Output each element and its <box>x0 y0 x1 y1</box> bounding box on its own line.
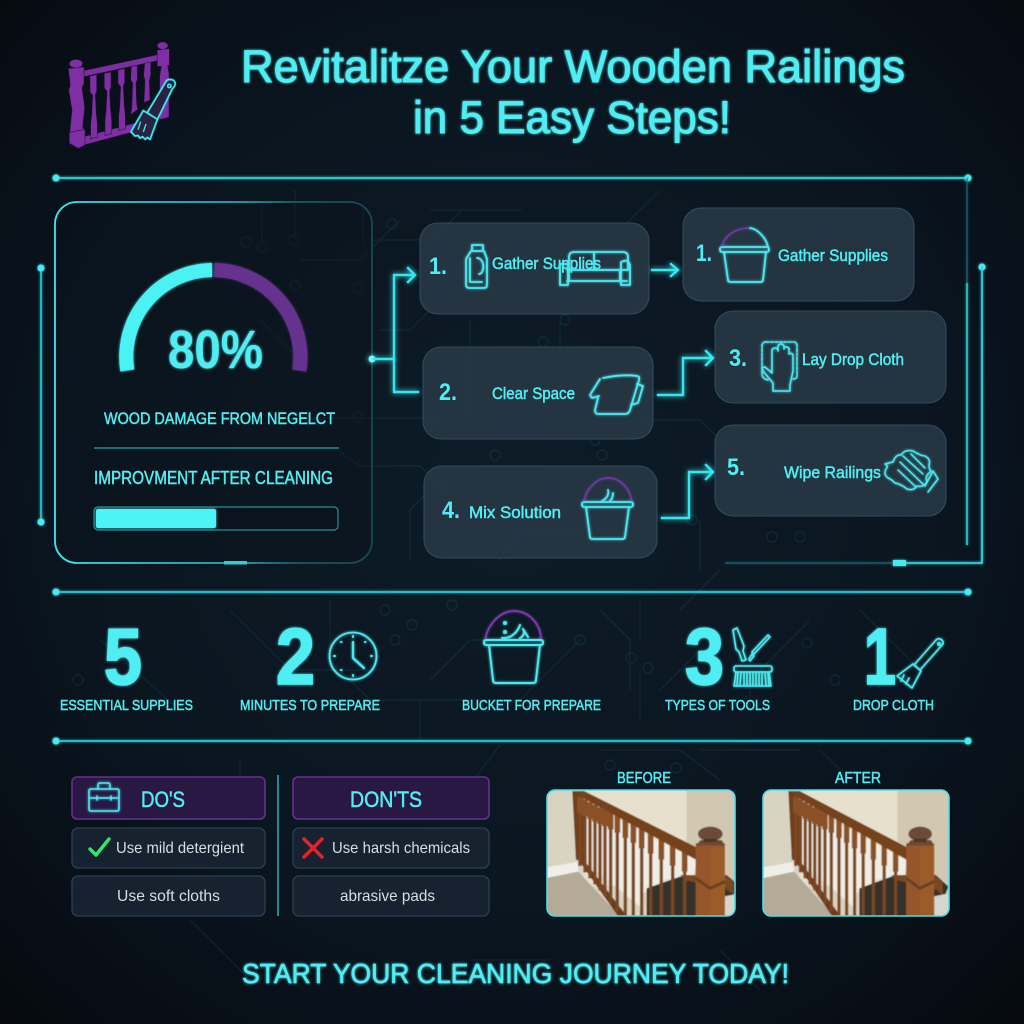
stat: 2 minutes to prepare: MINUTES TO PREPARE <box>240 698 380 714</box>
arrow: step 1 to next card <box>652 264 678 276</box>
panel: damage stats <box>55 202 372 564</box>
stat: bucket for prepare <box>462 611 601 714</box>
item: use soft cloths: Use soft cloths <box>117 888 220 905</box>
after photo: AFTER <box>835 770 881 787</box>
stat: 1 drop cloth: 1 <box>864 612 896 701</box>
step card: 1 gather supplies with sofa: 1. <box>429 253 447 280</box>
divider line above stats <box>52 588 972 596</box>
step card: 5 wipe railings <box>715 425 946 516</box>
arrows from panel to steps 1 and 2 <box>368 268 418 392</box>
icon: bucket with bubbles <box>484 611 543 683</box>
don'ts column <box>293 777 489 916</box>
item: use mild detergent: Use mild detergient <box>116 840 245 857</box>
step card: 4 mix solution <box>424 466 657 558</box>
icon: toolbox <box>89 783 119 811</box>
icon: hand wiping with cloth <box>885 450 938 492</box>
step card: 3 lay drop cloth: 3. <box>729 345 747 372</box>
don'ts column: DON'TS <box>350 787 422 812</box>
step card: 1 gather supplies with bucket: Gather Supplies <box>778 246 888 265</box>
arrow: step 2 to step 3 <box>658 351 713 395</box>
step card: 1 gather supplies with sofa: Gather Supplies <box>492 254 601 273</box>
do's column <box>72 777 265 916</box>
improvement label: IMPROVMENT AFTER CLEANING <box>94 468 333 488</box>
icon: detergent bottle <box>466 245 487 288</box>
step card: 4 mix solution: 4. <box>442 497 460 524</box>
step card: 1 gather supplies with bucket: 1. <box>696 240 712 267</box>
item: use harsh chemicals <box>293 828 489 868</box>
stat: 5 essential supplies: ESSENTIAL SUPPLIES <box>60 698 193 714</box>
step card: 3 lay drop cloth: Lay Drop Cloth <box>802 350 904 369</box>
title: in 5 Easy Steps! <box>413 92 731 143</box>
icon: bucket with foam <box>582 478 633 539</box>
step card: 2 clear space <box>423 347 653 439</box>
arrow: step 4 to step 5 <box>662 465 713 518</box>
item: abrasive pads: abrasive pads <box>340 888 435 905</box>
top divider line <box>52 174 972 182</box>
gauge chart <box>126 270 300 370</box>
step card: 1 gather supplies with bucket <box>683 208 914 301</box>
icon: clock <box>330 632 376 680</box>
stat: 2 minutes to prepare: 2 <box>276 612 315 701</box>
icon: bucket <box>720 228 769 282</box>
icon: paint brush <box>897 639 943 688</box>
stat: 3 types of tools <box>665 612 772 714</box>
do's column: DO'S <box>141 787 185 812</box>
step card: 4 mix solution: Mix Solution <box>469 503 561 522</box>
title <box>241 41 905 143</box>
title: Revitalitze Your Wooden Railings <box>241 41 905 92</box>
stat: 1 drop cloth: DROP CLOTH <box>853 698 934 714</box>
stat: 1 drop cloth <box>853 612 943 714</box>
column divider <box>277 775 279 916</box>
item: use soft cloths <box>72 876 265 916</box>
step card: 2 clear space: Clear Space <box>492 384 575 403</box>
before photo <box>546 772 736 917</box>
stat: 3 types of tools: TYPES OF TOOLS <box>665 698 770 714</box>
icon: hand on cloth <box>762 342 797 391</box>
call to action: START YOUR CLEANING JOURNEY TODAY! <box>242 958 789 989</box>
stat: 5 essential supplies: 5 <box>104 612 142 701</box>
icon: tools <box>733 628 772 686</box>
before photo: BEFORE <box>617 770 671 787</box>
icon: sofa <box>560 252 630 285</box>
stat: 2 minutes to prepare <box>240 612 380 714</box>
step card: 3 lay drop cloth <box>715 311 946 403</box>
step card: 1 gather supplies with sofa <box>420 223 649 314</box>
damage label: WOOD DAMAGE FROM NEGELCT <box>104 409 335 428</box>
item: use harsh chemicals: Use harsh chemicals <box>332 840 470 857</box>
step card: 2 clear space: 2. <box>439 379 457 406</box>
stat: 3 types of tools: 3 <box>685 612 724 701</box>
after photo <box>762 772 950 917</box>
circuit background pattern <box>73 190 920 990</box>
gauge value: 80% <box>168 320 263 380</box>
right side frame lines <box>725 178 986 566</box>
item: use mild detergent <box>72 828 265 868</box>
stat: bucket for prepare: BUCKET FOR PREPARE <box>462 698 601 714</box>
stat: 5 essential supplies <box>60 612 193 714</box>
icon: folded cloth <box>590 375 643 414</box>
progress bar <box>94 507 338 530</box>
item: abrasive pads <box>293 876 489 916</box>
left side line <box>38 264 44 526</box>
step card: 5 wipe railings: 5. <box>727 454 745 481</box>
divider line below stats <box>52 738 972 744</box>
icon: railing and brush <box>68 42 175 148</box>
step card: 5 wipe railings: Wipe Railings <box>784 463 881 482</box>
